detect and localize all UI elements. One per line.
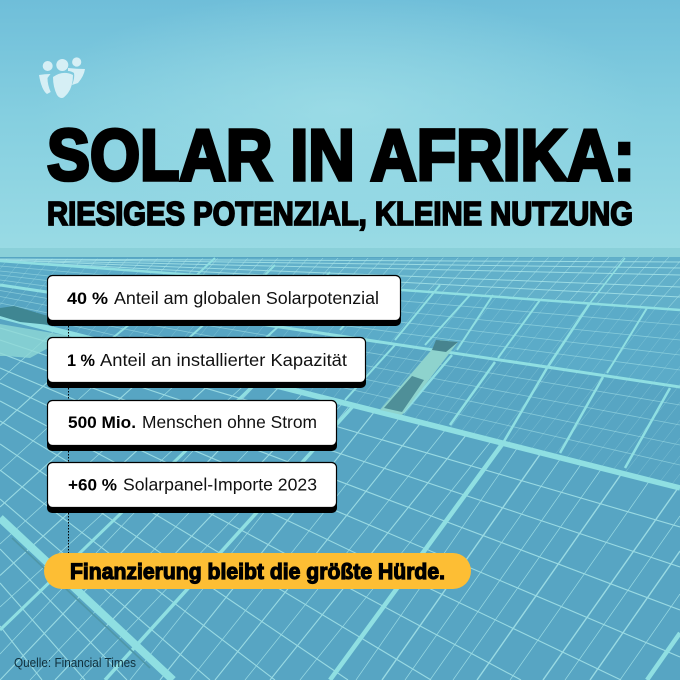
background: solar panel field [0, 257, 680, 680]
card: 500 Mio. Menschen: 500 Mio. [68, 413, 136, 432]
card: +60 % Importe [47, 462, 337, 513]
card: +60 % Importe: +60 % [68, 476, 117, 494]
card: 500 Mio. Menschen: Menschen ohne Strom [142, 412, 317, 432]
source: Quelle: Financial Times [14, 656, 136, 670]
background: sky [0, 0, 680, 262]
card: 40 % Solarpotenzial [47, 276, 401, 326]
card: +60 % Importe: Solarpanel-Importe 2023 [123, 474, 317, 494]
card: 40 % Solarpotenzial: 40 % [67, 289, 108, 308]
card: 40 % Solarpotenzial: Anteil am globalen Solarpotenzial [114, 288, 379, 308]
card: 1 % Kapazität: 1 % [67, 351, 95, 370]
icon: people logo [39, 57, 85, 98]
callout pill [44, 553, 471, 589]
card: 1 % Kapazität: Anteil an installierter Kapazität [100, 350, 347, 370]
callout pill: Finanzierung bleibt die größte Hürde. [70, 559, 445, 584]
card: 500 Mio. Menschen [47, 400, 337, 451]
card: 1 % Kapazität [47, 338, 366, 388]
dotted connector [68, 326, 70, 553]
